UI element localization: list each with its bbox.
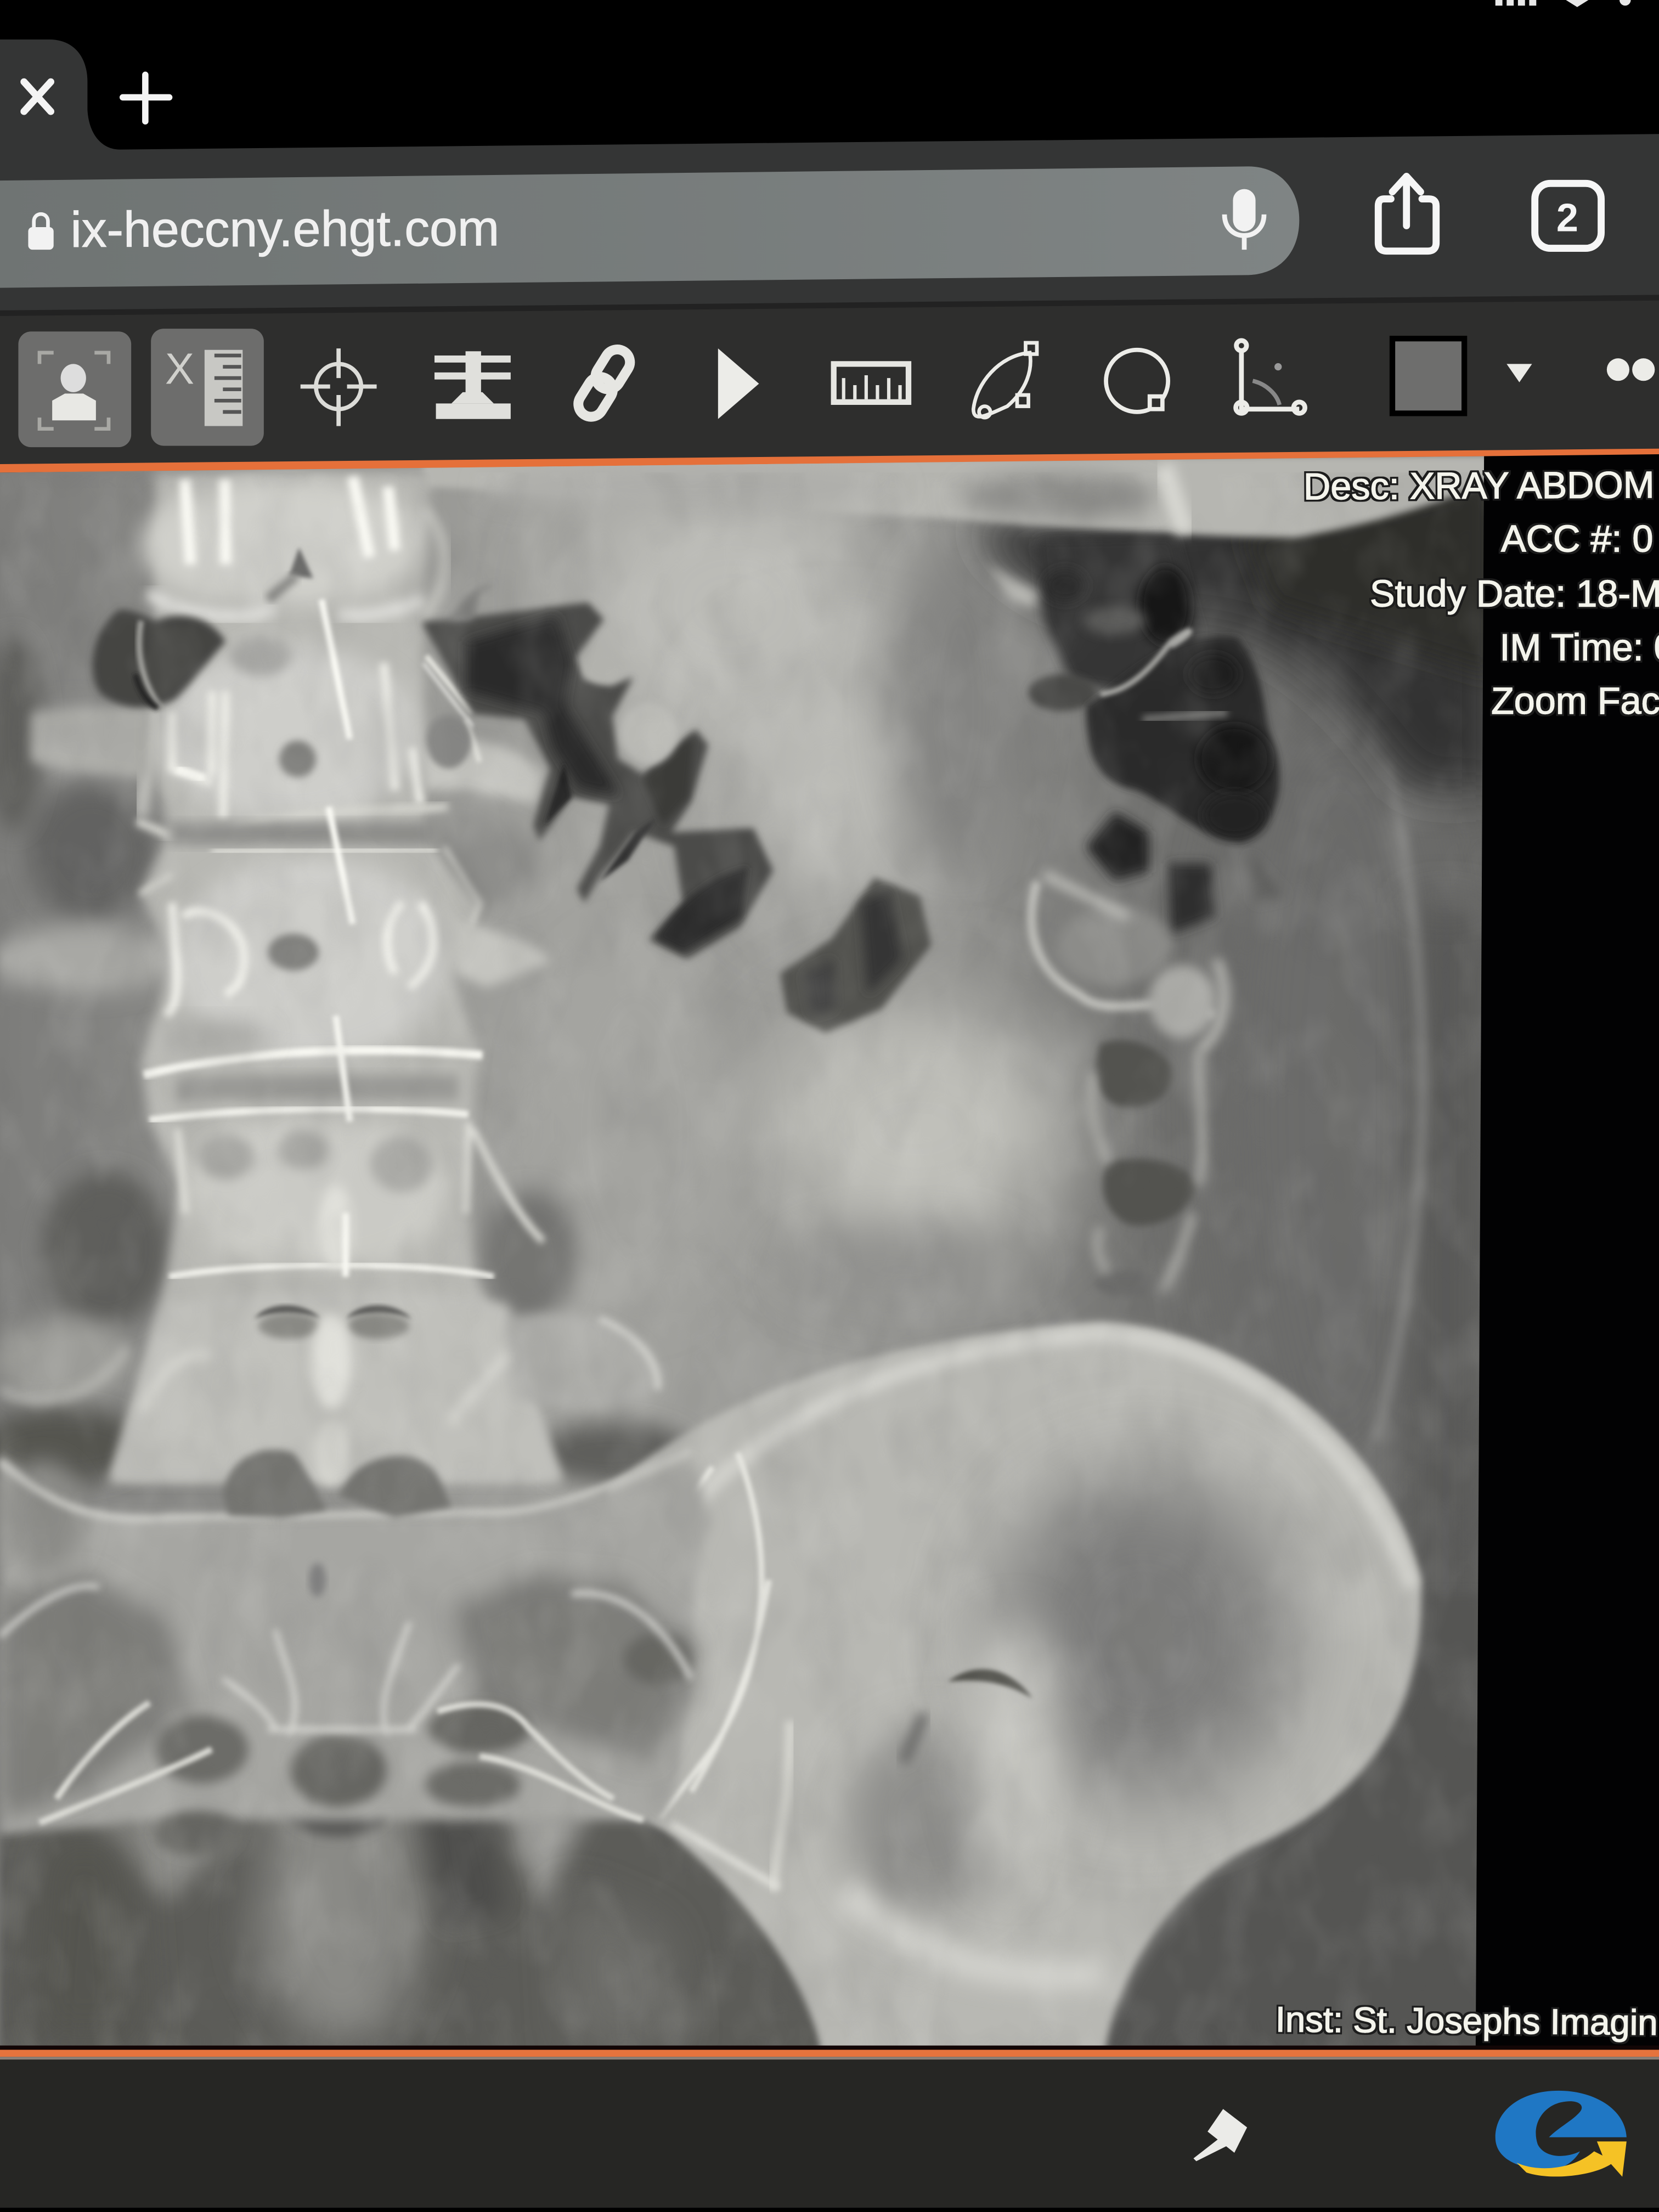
soft tissue tones (0, 466, 1481, 2059)
pin icon (1193, 2109, 1247, 2161)
ilium bone (607, 1323, 1421, 2059)
vertebra 1 (141, 477, 444, 620)
tool: circle (1106, 350, 1168, 412)
lower arches (223, 1450, 328, 1518)
tool button: x ruler (151, 329, 264, 446)
dark pelvic basin (0, 1750, 824, 2059)
colon fold highlights (584, 649, 624, 683)
bowel gas: transverse colon (422, 585, 773, 960)
right transverse process (423, 733, 543, 804)
top orange rule (0, 449, 1659, 472)
left transverse process (31, 706, 148, 778)
sacral foramina (155, 1716, 249, 1783)
more dots (1607, 358, 1655, 381)
microphone icon (1224, 189, 1264, 250)
study overlay text (1304, 464, 1659, 722)
film mottling (0, 472, 1489, 2052)
institution text: Inst: St. Josephs Imagin (1275, 1999, 1658, 2042)
tool: play (718, 348, 759, 419)
tool: ruler (834, 364, 909, 402)
bottom orange rule (0, 2046, 1659, 2059)
tool button: x ruler: X (165, 344, 194, 393)
status bar icons (1496, 0, 1631, 7)
url text: ix-heccny.ehgt.com (70, 200, 499, 258)
study overlay text: Zoom Fac (1491, 680, 1659, 722)
lower right dark region (1101, 1594, 1481, 2059)
bowel gas: descending colon (988, 536, 1286, 934)
tool: freehand (973, 343, 1037, 417)
lumbar spine (0, 472, 660, 1518)
vertebra 2 (31, 636, 543, 845)
viewer toolbar (0, 295, 1659, 471)
e logo (1496, 2091, 1627, 2177)
dark area below diaphragm (973, 472, 1496, 790)
browser chrome (0, 40, 1659, 472)
diaphragm bright band (423, 454, 1489, 538)
bottom bar (0, 2059, 1659, 2208)
tool: link (574, 345, 635, 421)
vertebra 3 (140, 847, 550, 1101)
tool button: patient (18, 331, 131, 447)
share icon (1378, 176, 1436, 251)
study overlay text: ACC #: 0 (1501, 518, 1653, 560)
foramina (254, 1305, 321, 1319)
bowel gas: left (93, 610, 225, 709)
vertebra 4 (150, 1109, 543, 1277)
tool: crosshair (301, 348, 377, 426)
study overlay text: Study Date: 18-M (1370, 573, 1659, 615)
black side panel (1476, 454, 1659, 2059)
colon wall pouches (1031, 874, 1224, 1296)
lock icon (28, 214, 54, 250)
new tab icon (123, 75, 170, 121)
tool: colour swatch (1392, 338, 1464, 413)
tab close icon (24, 82, 51, 111)
study overlay text: Desc: XRAY ABDOM (1304, 464, 1655, 507)
tool: angle (1236, 341, 1305, 413)
tool: pedestal (435, 351, 511, 419)
tabs count icon (1535, 183, 1601, 249)
sacrum (0, 1450, 713, 1857)
spinous wire line (321, 600, 353, 1277)
x-ray image (0, 452, 1659, 2059)
dropdown arrow (1506, 364, 1532, 382)
address bar (0, 166, 1299, 288)
bowel gas: mid colon (780, 877, 931, 1032)
tabs count icon: 2 (1556, 196, 1578, 240)
vertebra 5 (0, 1291, 660, 1518)
